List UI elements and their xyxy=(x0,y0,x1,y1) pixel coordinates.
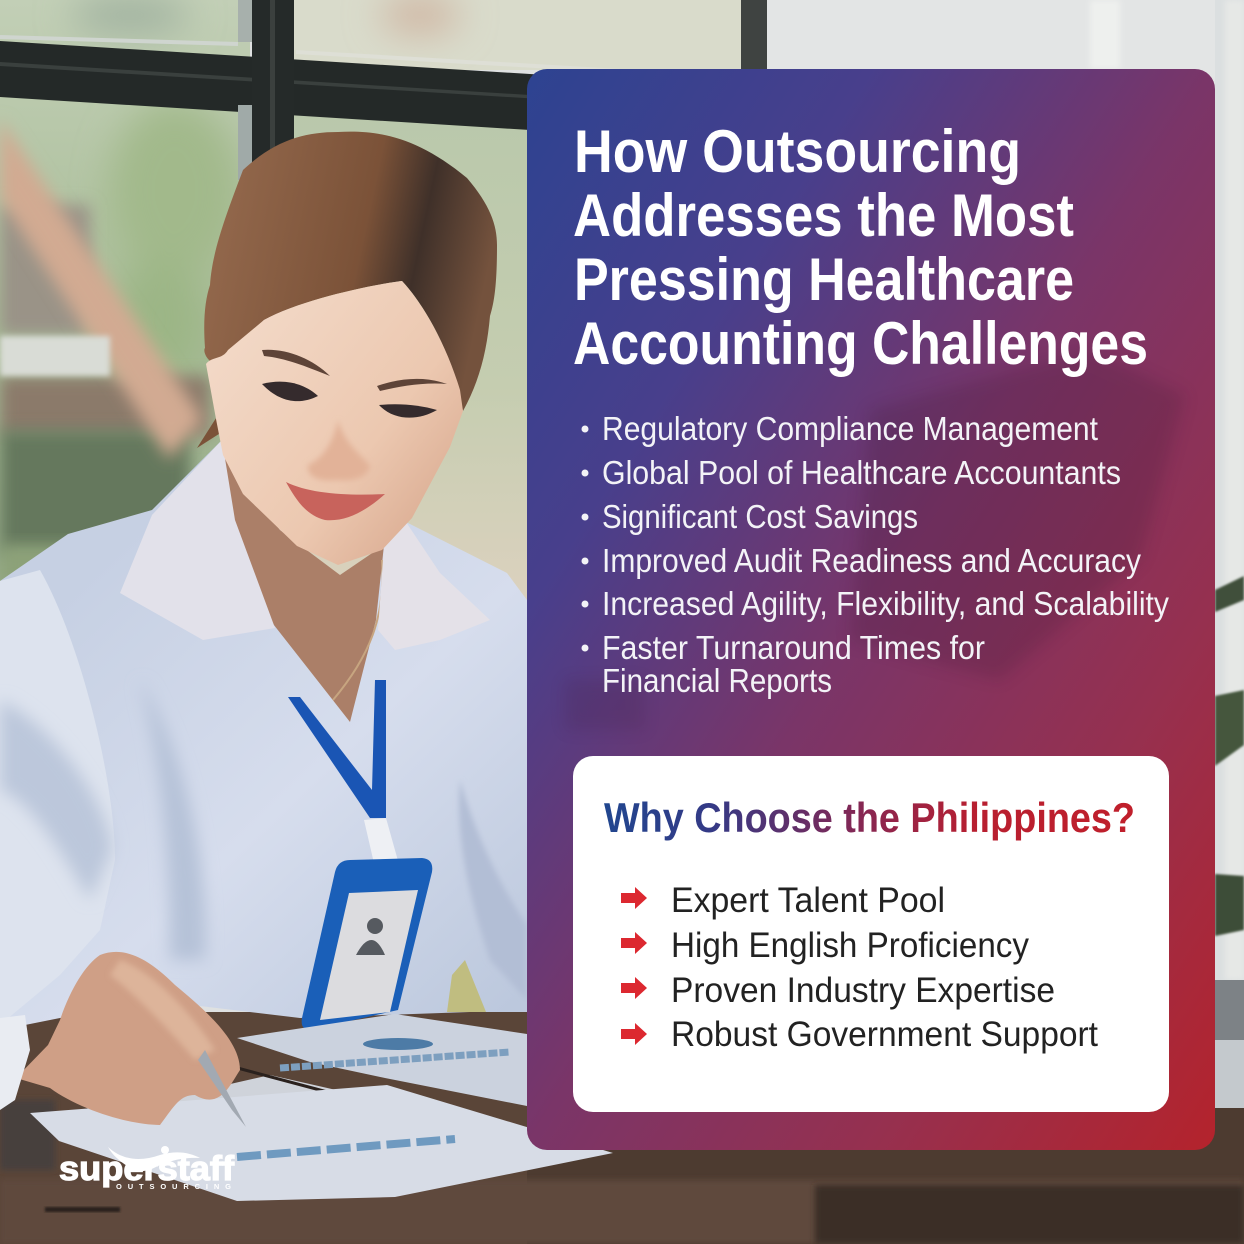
pen xyxy=(198,1050,246,1127)
left sleeve xyxy=(0,570,115,1025)
necklace xyxy=(333,560,382,700)
heading: Pressing Healthcare xyxy=(574,246,1074,313)
reasons list: Expert Talent Pool xyxy=(671,881,945,920)
reasons list: Robust Government Support xyxy=(671,1015,1098,1054)
bullet list: outsourcing benefits: Regulatory Compliance Management xyxy=(602,410,1098,447)
hair xyxy=(204,132,497,411)
plant at right edge xyxy=(1215,576,1244,936)
bullet list: outsourcing benefits: Faster Turnaround Times for xyxy=(602,629,985,666)
subheading: Why Choose the Philippines? xyxy=(604,794,1135,841)
ID badge xyxy=(302,858,432,1030)
face xyxy=(206,281,463,565)
eyes xyxy=(262,382,318,401)
bullet list: outsourcing benefits: Improved Audit Readiness and Accuracy xyxy=(602,542,1141,579)
icon: red arrow xyxy=(621,977,647,999)
nose shadow xyxy=(308,420,370,480)
reasons list: Proven Industry Expertise xyxy=(671,971,1055,1010)
window frame xyxy=(0,0,770,190)
hand with pen xyxy=(16,952,246,1127)
shirt body xyxy=(0,440,527,1030)
ponytail wisp xyxy=(197,415,222,448)
eyebrows xyxy=(262,350,330,376)
paper stack at left xyxy=(0,1015,30,1110)
logo: superstaff outsourcing: OUTSOURCING xyxy=(116,1182,231,1191)
lips xyxy=(286,482,385,520)
bullet list: outsourcing benefits: Increased Agility, Flexibility, and Scalability xyxy=(602,585,1169,622)
bullet list: outsourcing benefits: Global Pool of Healthcare Accountants xyxy=(602,454,1121,491)
left collar xyxy=(120,440,275,640)
chair gap xyxy=(447,960,486,1012)
lanyard clip xyxy=(364,818,400,872)
bullet list: outsourcing benefits: Financial Reports xyxy=(602,662,832,699)
shirt fold shadows xyxy=(140,680,206,960)
heading: How Outsourcing xyxy=(574,118,1021,185)
blurred roof beam xyxy=(0,119,203,459)
icon: red arrow xyxy=(621,887,647,909)
icon: red arrow xyxy=(621,932,647,954)
heading: Accounting Challenges xyxy=(573,310,1148,377)
logo swoosh xyxy=(108,1147,200,1172)
bullet list: outsourcing benefits: Significant Cost Savings xyxy=(602,498,918,535)
bullet list: outsourcing benefits xyxy=(582,410,1169,699)
panel: gradient card xyxy=(527,69,1215,1150)
reasons list: High English Proficiency xyxy=(671,926,1029,965)
heading xyxy=(573,118,1148,377)
panel: why choose the Philippines xyxy=(573,756,1169,1112)
lanyard xyxy=(288,680,386,818)
documents on desk xyxy=(30,1014,613,1201)
outdoor view through window xyxy=(0,0,770,620)
blurred white railing xyxy=(0,336,110,376)
right collar xyxy=(378,522,490,650)
logo: superstaff outsourcing: superstaff xyxy=(59,1150,235,1188)
neck and chest xyxy=(222,455,384,722)
plant shadow through the panel xyxy=(565,350,1185,730)
icon: red arrow xyxy=(621,1023,647,1045)
curtain xyxy=(765,0,1244,980)
reasons list xyxy=(671,881,1098,1054)
objects on desk at right edge xyxy=(1215,980,1244,1108)
wood desk xyxy=(0,1012,1244,1244)
heading: Addresses the Most xyxy=(573,182,1074,249)
